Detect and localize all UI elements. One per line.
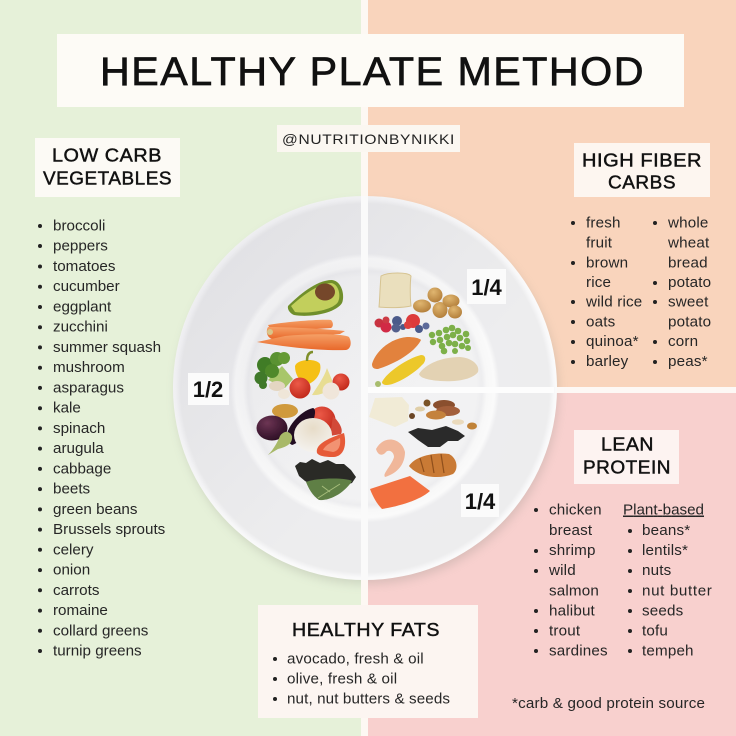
list: carbs column 1: wild rice bbox=[585, 294, 642, 310]
list: vegetables: arugula bbox=[53, 440, 104, 457]
list: carbs column 2: wheat bbox=[667, 234, 710, 252]
heading: low carb vegetables: VEGETABLES bbox=[43, 168, 172, 188]
heading: lean protein: LEAN bbox=[601, 434, 654, 454]
list: vegetables: celery bbox=[53, 541, 94, 558]
heading: high fiber carbs: HIGH FIBER bbox=[582, 150, 702, 170]
panel: high fiber carbs bbox=[571, 143, 711, 370]
heading: healthy fats: HEALTHY FATS bbox=[292, 619, 440, 640]
list: carbs column 1: rice bbox=[586, 274, 611, 291]
list: animal protein: trout bbox=[549, 622, 581, 640]
food: vegetables half bbox=[254, 280, 356, 500]
list: carbs column 2: bread bbox=[668, 254, 708, 272]
panel: healthy fats bbox=[258, 605, 478, 718]
icon: tomatoes, squash and mushrooms bbox=[269, 368, 350, 400]
list: animal protein bbox=[534, 502, 608, 660]
panel: lean protein bbox=[534, 430, 712, 660]
list: plant-based protein: tempeh bbox=[642, 642, 694, 660]
list: carbs column 2: whole bbox=[667, 214, 709, 232]
list: vegetables: broccoli bbox=[53, 218, 105, 234]
list: plant-based protein: lentils* bbox=[642, 542, 688, 559]
icon: corn bbox=[382, 355, 425, 385]
icon: eggplant, onion and garlic bbox=[256, 404, 345, 457]
list: animal protein: shrimp bbox=[549, 542, 596, 559]
background: pink quarter bbox=[368, 393, 736, 736]
heading: low carb vegetables bbox=[35, 138, 180, 197]
icon: yellow pepper bbox=[295, 352, 320, 384]
list: vegetables: cucumber bbox=[53, 278, 120, 295]
title: HEALTHY PLATE METHOD bbox=[100, 50, 645, 94]
list: animal protein: sardines bbox=[549, 642, 608, 660]
handle: @NUTRITIONBYNIKKI bbox=[282, 131, 455, 147]
footnote: *carb & good protein source bbox=[512, 695, 705, 712]
list: vegetables: beets bbox=[53, 481, 91, 498]
list: plant-based protein: tofu bbox=[642, 622, 668, 640]
heading: lean protein bbox=[574, 430, 679, 484]
heading: high fiber carbs: CARBS bbox=[608, 172, 676, 192]
label: 1/4 bottom bbox=[461, 484, 499, 517]
list: fats: avocado, fresh & oil bbox=[287, 650, 424, 668]
list: carbs column 1: fresh bbox=[586, 214, 621, 232]
list: vegetables: carrots bbox=[53, 582, 100, 599]
handle bbox=[277, 125, 460, 152]
list: carbs column 1: quinoa* bbox=[586, 333, 639, 350]
icon: shrimp bbox=[376, 439, 405, 477]
icon: salmon bbox=[370, 476, 430, 509]
list: vegetables: green beans bbox=[53, 501, 138, 518]
icon: broccoli bbox=[254, 352, 293, 389]
list: animal protein: wild bbox=[548, 562, 576, 579]
list: carbs column 1 bbox=[571, 214, 642, 370]
label: 1/4 top: 1/4 bbox=[471, 275, 503, 300]
list: vegetables: eggplant bbox=[53, 298, 112, 316]
list: carbs column 2 bbox=[653, 214, 711, 370]
label: 1/2 bbox=[188, 373, 229, 405]
icon: peas bbox=[429, 325, 471, 354]
list: plant-based protein: Plant-based bbox=[623, 502, 704, 518]
list: vegetables: kale bbox=[53, 400, 81, 417]
background: peach quarter bbox=[368, 0, 736, 387]
food: protein quarter bbox=[369, 397, 477, 509]
list: vegetables: collard greens bbox=[53, 622, 149, 639]
heading: low carb vegetables: LOW CARB bbox=[52, 144, 162, 166]
food: carbs quarter bbox=[372, 273, 478, 387]
list: vegetables bbox=[38, 218, 166, 660]
list: carbs column 1: oats bbox=[586, 314, 616, 330]
heading: lean protein: PROTEIN bbox=[583, 456, 671, 478]
icon: bread bbox=[379, 273, 411, 308]
list: carbs column 1: barley bbox=[586, 353, 629, 370]
list: plant-based protein bbox=[623, 502, 712, 660]
list: animal protein: breast bbox=[549, 522, 593, 539]
icon: avocado bbox=[288, 280, 343, 316]
label: 1/2: 1/2 bbox=[193, 377, 223, 402]
list: vegetables: summer squash bbox=[53, 339, 161, 356]
icon: carrots bbox=[257, 320, 351, 350]
list: plant-based protein: nuts bbox=[642, 562, 672, 579]
title bbox=[57, 34, 684, 107]
panel: low carb vegetables bbox=[35, 138, 180, 660]
list: carbs column 2: sweet bbox=[668, 294, 709, 310]
list: animal protein: salmon bbox=[549, 582, 599, 600]
plate shadow bbox=[176, 202, 558, 584]
list: carbs column 1: brown bbox=[586, 254, 628, 272]
list: vegetables: romaine bbox=[53, 602, 108, 619]
list: carbs column 2: peas* bbox=[668, 353, 708, 370]
list: vegetables: asparagus bbox=[53, 379, 124, 396]
icon: berries bbox=[374, 314, 430, 333]
list: vegetables: tomatoes bbox=[53, 258, 116, 275]
icon: tofu bbox=[369, 397, 409, 427]
icon: grilled chicken bbox=[409, 454, 456, 477]
icon: corn stem bbox=[375, 381, 381, 387]
list: fats bbox=[273, 650, 450, 708]
list: vegetables: spinach bbox=[53, 420, 105, 437]
list: vegetables: onion bbox=[53, 562, 90, 579]
list: vegetables: mushroom bbox=[53, 359, 125, 376]
list: fats: olive, fresh & oil bbox=[287, 670, 397, 688]
icon: nuts bbox=[409, 400, 477, 430]
list: animal protein: chicken bbox=[549, 502, 602, 518]
list: fats: nut, nut butters & seeds bbox=[287, 690, 450, 708]
icon: potatoes bbox=[413, 288, 462, 318]
list: carbs column 2: corn bbox=[668, 333, 698, 350]
list: vegetables: cabbage bbox=[53, 460, 111, 477]
list: animal protein: halibut bbox=[549, 602, 596, 620]
icon: dark leafy greens bbox=[295, 459, 356, 500]
list: carbs column 1: fruit bbox=[586, 234, 613, 252]
label: 1/4 bottom: 1/4 bbox=[465, 489, 496, 514]
icon: brown rice bbox=[419, 357, 478, 381]
background: green half bbox=[0, 0, 361, 736]
list: vegetables: Brussels sprouts bbox=[53, 521, 166, 538]
dividers bbox=[361, 0, 736, 736]
icon: sweet potato bbox=[372, 337, 421, 369]
list: vegetables: turnip greens bbox=[53, 642, 142, 660]
list: plant-based protein: beans* bbox=[642, 522, 690, 539]
heading: high fiber carbs bbox=[574, 143, 710, 197]
list: plant-based protein: nut butter bbox=[642, 582, 712, 600]
list: carbs column 2: potato bbox=[668, 274, 711, 291]
icon: black beans bbox=[408, 426, 465, 447]
list: vegetables: peppers bbox=[53, 238, 108, 254]
list: carbs column 2: potato bbox=[668, 314, 711, 330]
label: 1/4 top bbox=[467, 269, 506, 304]
list: vegetables: zucchini bbox=[53, 319, 108, 336]
list: plant-based protein: seeds bbox=[642, 602, 684, 620]
plate bbox=[173, 196, 557, 580]
